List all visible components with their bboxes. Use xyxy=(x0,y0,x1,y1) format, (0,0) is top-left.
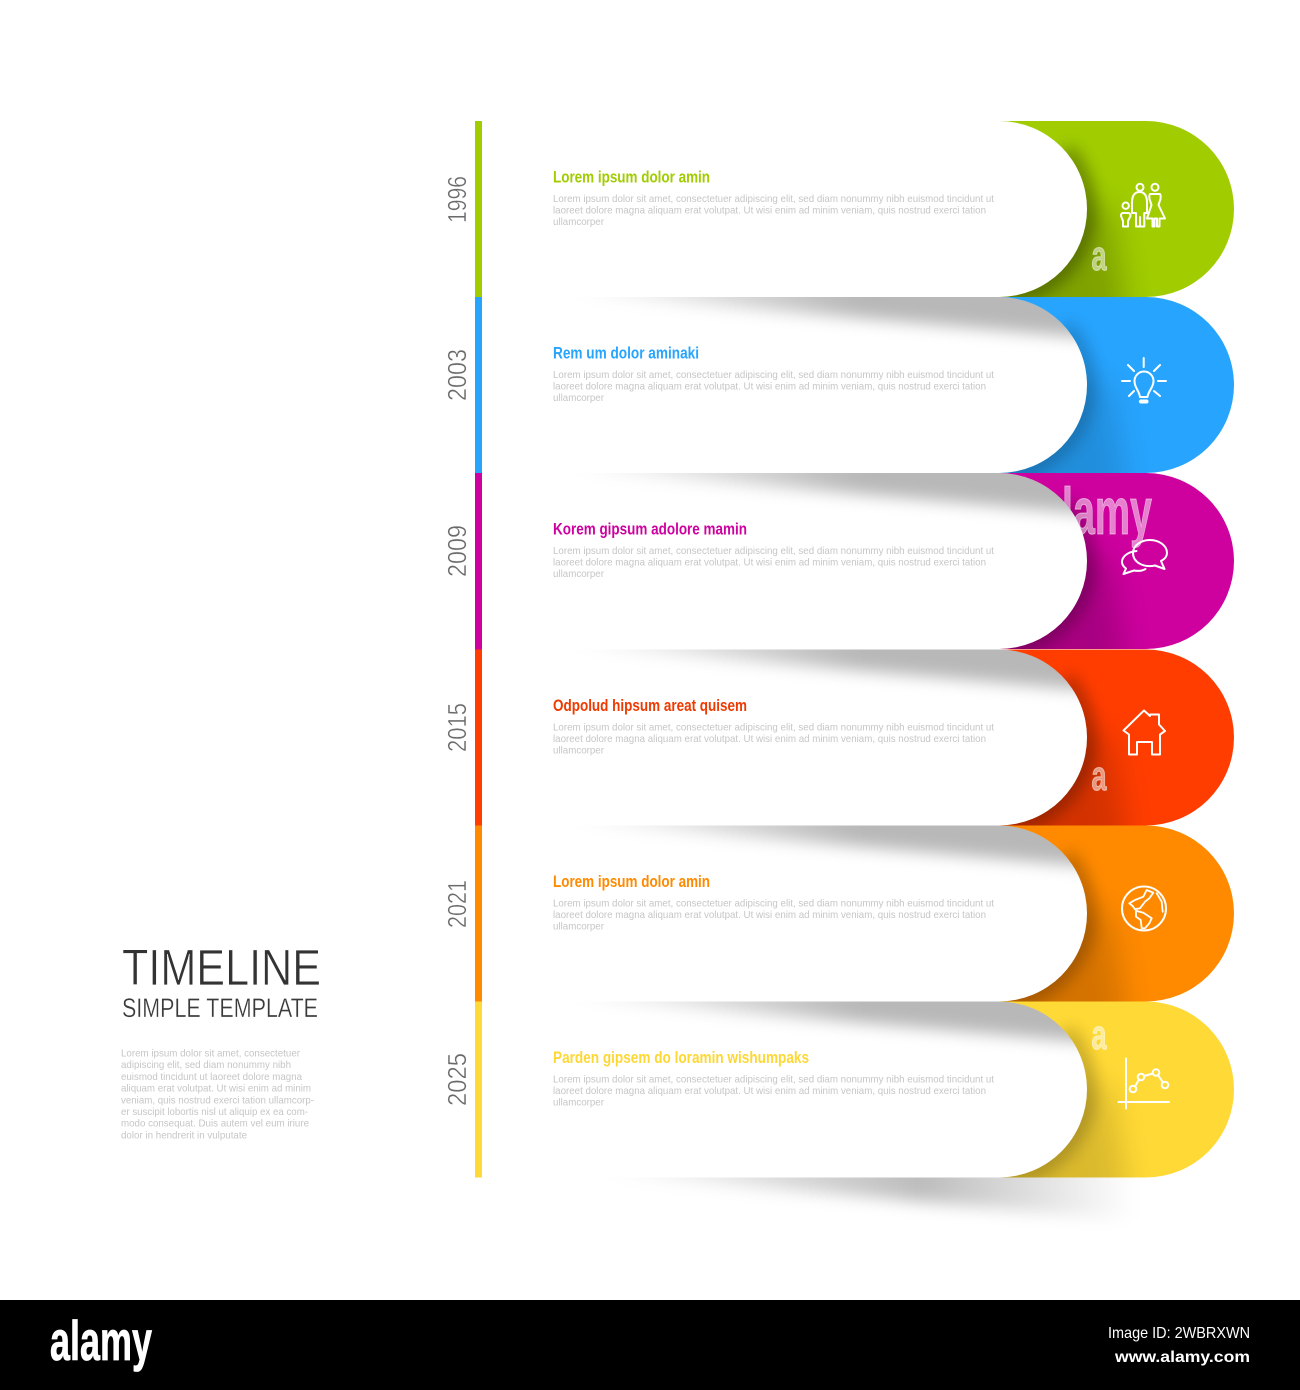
description text: veniam, quis nostrud exerci tation ullamcorp- xyxy=(121,1095,314,1106)
year label: 2015 xyxy=(442,703,472,752)
white card xyxy=(482,1002,1087,1178)
panel: 1996 row xyxy=(448,121,1234,297)
card shadow xyxy=(633,1002,1078,1050)
colored tab xyxy=(1000,297,1234,473)
body text xyxy=(553,546,994,580)
timeline bar segment xyxy=(475,826,482,1002)
body text: laoreet dolore magna aliquam erat volutpat. Ut wisi enim ad minim veniam, quis nostrud exerci tation xyxy=(553,1086,986,1097)
colored tab xyxy=(1000,1002,1234,1178)
body text xyxy=(553,1074,994,1109)
year label: 2009 xyxy=(442,525,472,577)
site address: www.alamy.com xyxy=(1114,1349,1250,1366)
heading: Lorem ipsum dolor amin xyxy=(553,872,710,891)
year label: 2003 xyxy=(442,349,472,401)
description text: er suscipit lobortis nisl ut aliquip ex ea com- xyxy=(121,1107,308,1118)
white card xyxy=(482,121,1087,297)
heading: Korem gipsum adolore mamin xyxy=(553,520,747,538)
card shadow xyxy=(633,297,1078,346)
panel: 2021 row xyxy=(448,826,1234,1002)
subtitle: SIMPLE TEMPLATE xyxy=(122,993,318,1023)
description text: Lorem ipsum dolor sit amet, consectetuer xyxy=(121,1048,301,1060)
body text: ullamcorper xyxy=(553,1098,605,1109)
body text: ullamcorper xyxy=(553,569,605,580)
footer band xyxy=(0,1300,1300,1390)
body text xyxy=(553,370,994,404)
panel: title block xyxy=(121,939,321,1141)
year label: 1996 xyxy=(442,176,472,223)
footer logo: alamy xyxy=(50,1309,152,1372)
heading: Rem um dolor aminaki xyxy=(553,344,699,362)
description text: aliquam erat volutpat. Ut wisi enim ad minim xyxy=(121,1084,311,1095)
timeline bar segment xyxy=(475,297,482,473)
white card xyxy=(482,473,1087,649)
icon: light bulb xyxy=(1122,358,1166,402)
icon: family xyxy=(1121,184,1165,226)
white card xyxy=(482,826,1087,1002)
body text: ullamcorper xyxy=(553,393,605,404)
body text: Lorem ipsum dolor sit amet, consectetuer adipiscing elit, sed diam nonummy nibh euismod tincidunt ut xyxy=(553,546,994,557)
panel: 2015 row xyxy=(448,650,1234,826)
year label: 2025 xyxy=(442,1053,472,1106)
heading: Odpolud hipsum areat quisem xyxy=(553,696,747,715)
description text: dolor in hendrerit in vulputate xyxy=(121,1130,247,1141)
icon: globe xyxy=(1122,886,1166,930)
timeline bar segment xyxy=(475,473,482,650)
description text: modo consequat. Duis autem vel eum iriure xyxy=(121,1119,309,1130)
body text: laoreet dolore magna aliquam erat volutpat. Ut wisi enim ad minim veniam, quis nostrud exerci tation xyxy=(553,382,986,393)
description text: adipiscing elit, sed diam nonummy nibh xyxy=(121,1060,291,1071)
timeline bar segment xyxy=(475,121,482,297)
body text: Lorem ipsum dolor sit amet, consectetuer adipiscing elit, sed diam nonummy nibh euismod tincidunt ut xyxy=(553,722,994,734)
icon: speech bubbles xyxy=(1122,540,1167,574)
body text: laoreet dolore magna aliquam erat volutpat. Ut wisi enim ad minim veniam, quis nostrud exerci tation xyxy=(553,910,986,921)
panel: 2025 row xyxy=(448,1002,1234,1178)
body text: ullamcorper xyxy=(553,746,605,757)
year label: 2021 xyxy=(442,880,472,928)
shadow under last card xyxy=(670,1178,1108,1217)
white card xyxy=(482,297,1087,473)
body text: laoreet dolore magna aliquam erat volutpat. Ut wisi enim ad minim veniam, quis nostrud exerci tation xyxy=(553,206,986,217)
body text: Lorem ipsum dolor sit amet, consectetuer adipiscing elit, sed diam nonummy nibh euismod tincidunt ut xyxy=(553,370,994,381)
image id: Image ID: 2WBRXWN xyxy=(1108,1325,1250,1342)
body text: ullamcorper xyxy=(553,922,605,933)
timeline bar segment xyxy=(475,650,482,826)
body text: laoreet dolore magna aliquam erat volutpat. Ut wisi enim ad minim veniam, quis nostrud exerci tation xyxy=(553,558,986,569)
watermark word: alamy xyxy=(1040,474,1152,548)
colored tab xyxy=(1000,121,1234,297)
body text xyxy=(553,722,994,757)
body text: Lorem ipsum dolor sit amet, consectetuer adipiscing elit, sed diam nonummy nibh euismod tincidunt ut xyxy=(553,194,994,205)
heading: Lorem ipsum dolor amin xyxy=(553,168,710,186)
body text: Lorem ipsum dolor sit amet, consectetuer adipiscing elit, sed diam nonummy nibh euismod tincidunt ut xyxy=(553,898,994,910)
description text: euismod tincidunt ut laoreet dolore magna xyxy=(121,1072,302,1083)
card shadow xyxy=(633,826,1078,874)
colored tab xyxy=(1000,473,1234,649)
body text xyxy=(553,898,994,933)
panel: 2003 row xyxy=(448,297,1234,473)
icon: line chart xyxy=(1118,1058,1169,1108)
watermark letter: a xyxy=(1092,752,1107,799)
timeline bar segment xyxy=(475,1002,482,1178)
card shadow xyxy=(633,473,1078,522)
panel: 2009 row xyxy=(442,457,1240,713)
title: TIMELINE xyxy=(122,939,321,996)
white card xyxy=(482,650,1087,826)
body text: Lorem ipsum dolor sit amet, consectetuer adipiscing elit, sed diam nonummy nibh euismod tincidunt ut xyxy=(553,1074,994,1086)
body text xyxy=(553,194,994,228)
colored tab xyxy=(1000,826,1234,1002)
heading: Parden gipsem do loramin wishumpaks xyxy=(553,1048,809,1067)
body text: laoreet dolore magna aliquam erat volutpat. Ut wisi enim ad minim veniam, quis nostrud exerci tation xyxy=(553,734,986,745)
watermark letter: a xyxy=(1092,232,1107,279)
icon: house xyxy=(1124,710,1165,754)
watermark letter: a xyxy=(1092,1011,1107,1058)
body text: ullamcorper xyxy=(553,217,605,228)
card shadow xyxy=(633,650,1078,698)
colored tab xyxy=(1000,650,1234,826)
description text xyxy=(121,1048,314,1141)
